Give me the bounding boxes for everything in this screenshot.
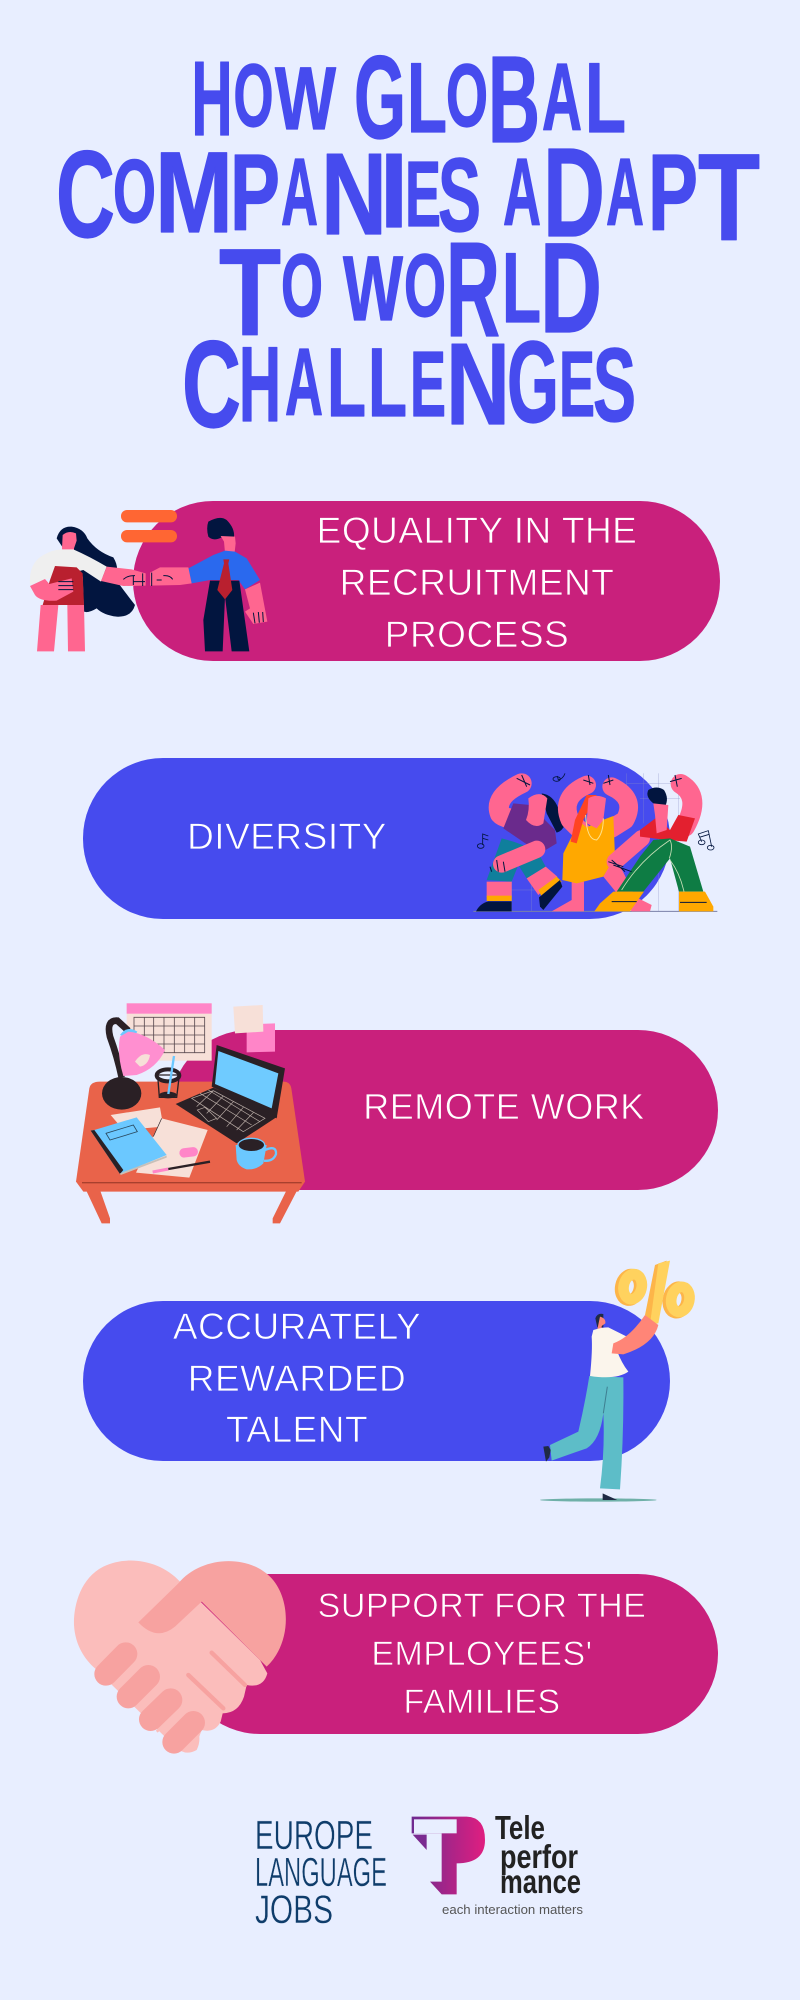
heading: support for the employees' families	[318, 1587, 646, 1721]
heading: remote work: REMOTE WORK	[363, 1086, 645, 1127]
title: O	[113, 142, 156, 242]
title: L	[407, 42, 447, 153]
logo: Teleperformance: each interaction matters	[442, 1902, 584, 1917]
icon: two people shaking hands	[30, 510, 267, 651]
title: E	[559, 332, 595, 436]
panel: equality in the recruitment process	[30, 501, 720, 661]
heading: support for the employees' families: FAMILIES	[403, 1683, 561, 1721]
title: O	[404, 235, 446, 335]
title: W	[343, 238, 403, 340]
title: A	[281, 139, 318, 246]
panel: diversity	[83, 758, 717, 919]
title: D	[540, 217, 602, 360]
title: H	[239, 324, 281, 444]
title: P	[648, 132, 698, 254]
title	[56, 32, 760, 454]
logo: Teleperformance	[412, 1809, 584, 1917]
icon: person holding percent sign	[540, 1261, 692, 1502]
logo: Teleperformance: Tele	[495, 1809, 545, 1846]
title: O	[281, 235, 323, 335]
heading: accurately rewarded talent: ACCURATELY	[173, 1306, 421, 1347]
title: E	[405, 142, 441, 246]
title: C	[56, 127, 115, 264]
icon: handshake heart	[74, 1561, 286, 1753]
heading: support for the employees' families: EMPLOYEES'	[371, 1635, 593, 1673]
heading: support for the employees' families: SUPPORT FOR THE	[318, 1587, 646, 1625]
logo: Teleperformance: mance	[500, 1863, 581, 1900]
title: N	[321, 129, 387, 259]
title: M	[155, 129, 233, 257]
heading: accurately rewarded talent	[173, 1306, 421, 1450]
heading: equality in the recruitment process: RECRUITMENT	[340, 562, 614, 603]
title: T	[698, 130, 760, 267]
title: O	[234, 45, 274, 145]
heading: diversity: DIVERSITY	[187, 816, 387, 857]
title: L	[368, 328, 407, 437]
heading: equality in the recruitment process	[317, 510, 637, 655]
title: G	[507, 317, 559, 447]
heading: equality in the recruitment process: EQUALITY IN THE	[317, 510, 637, 551]
title: S	[438, 137, 481, 254]
title: A	[503, 139, 541, 246]
logo: Europe Language Jobs: JOBS	[255, 1888, 333, 1932]
logo: Europe Language Jobs: EUROPE	[255, 1812, 373, 1858]
title: B	[488, 32, 540, 169]
logo: Europe Language Jobs	[255, 1812, 387, 1932]
title: A	[542, 44, 582, 151]
title: P	[230, 132, 280, 254]
title: L	[502, 232, 541, 343]
title: E	[410, 332, 446, 436]
title: T	[219, 225, 281, 362]
title: A	[285, 329, 323, 436]
title: R	[446, 214, 500, 365]
title: L	[327, 328, 366, 437]
title: G	[354, 32, 406, 164]
panel: accurately rewarded talent	[83, 1261, 692, 1502]
title: W	[275, 48, 336, 148]
title: I	[380, 132, 408, 250]
panel: remote work	[76, 1003, 718, 1223]
title: N	[446, 319, 510, 449]
title: D	[543, 122, 605, 263]
panel: support for the employees' families	[74, 1561, 718, 1753]
logo: Teleperformance: perfor	[500, 1838, 578, 1875]
icon: office desk with laptop	[76, 1003, 305, 1223]
title: C	[182, 317, 241, 454]
title: O	[446, 45, 488, 145]
logo: Europe Language Jobs: LANGUAGE	[255, 1849, 387, 1895]
title: A	[606, 139, 644, 246]
title: H	[192, 40, 232, 158]
title: S	[593, 327, 636, 444]
heading: accurately rewarded talent: TALENT	[226, 1409, 368, 1450]
title: L	[585, 42, 626, 153]
heading: equality in the recruitment process: PROCESS	[385, 614, 569, 655]
heading: accurately rewarded talent: REWARDED	[188, 1358, 406, 1399]
icon: three people dancing	[473, 773, 717, 911]
